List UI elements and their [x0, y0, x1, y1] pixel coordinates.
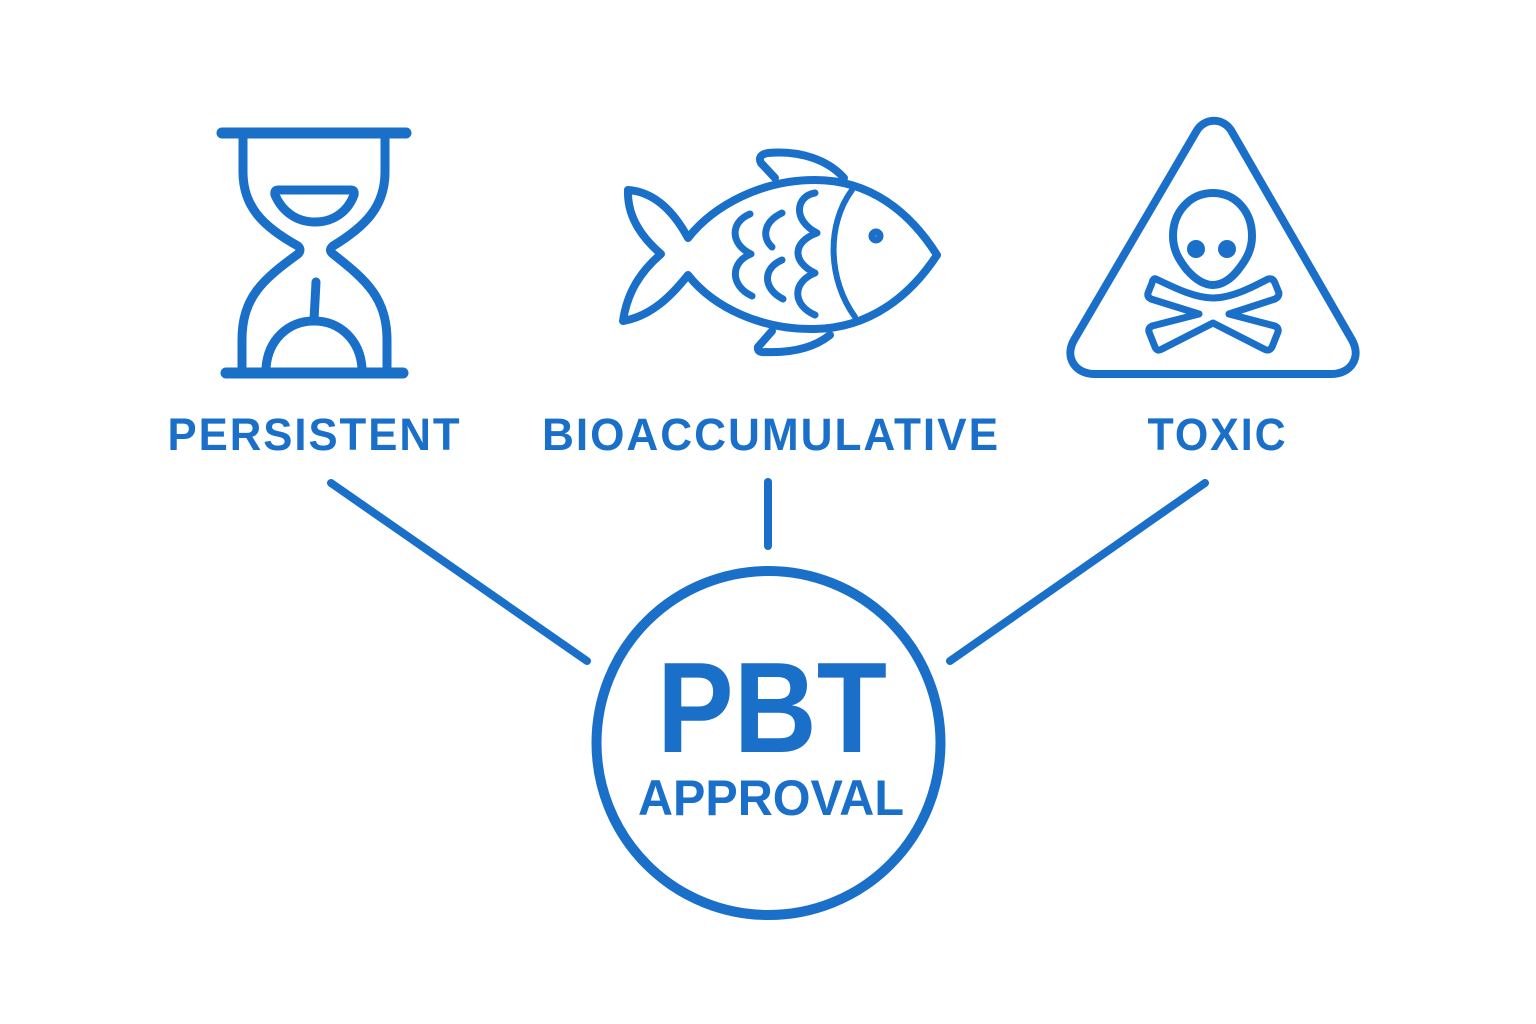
connector: toxic to PBT — [950, 483, 1205, 661]
label: persistent: PERSISTENT — [168, 409, 462, 460]
icon: hourglass — [222, 133, 406, 373]
badge: PBT approval — [596, 571, 940, 915]
badge heading: PBT — [657, 636, 887, 780]
badge subheading: APPROVAL — [638, 770, 904, 826]
label: toxic: TOXIC — [1148, 409, 1288, 460]
connector: bioaccumulative to PBT — [764, 482, 772, 546]
crossbones — [1148, 279, 1279, 350]
icon: toxic warning triangle — [1070, 121, 1356, 374]
skull — [1173, 193, 1252, 285]
triangle outline — [1070, 121, 1356, 374]
icon: fish — [623, 152, 937, 352]
connector: persistent to PBT — [331, 483, 587, 661]
label: bioaccumulative: BIOACCUMULATIVE — [542, 409, 1000, 460]
badge circle — [596, 571, 940, 915]
skull eyes — [1187, 240, 1236, 258]
